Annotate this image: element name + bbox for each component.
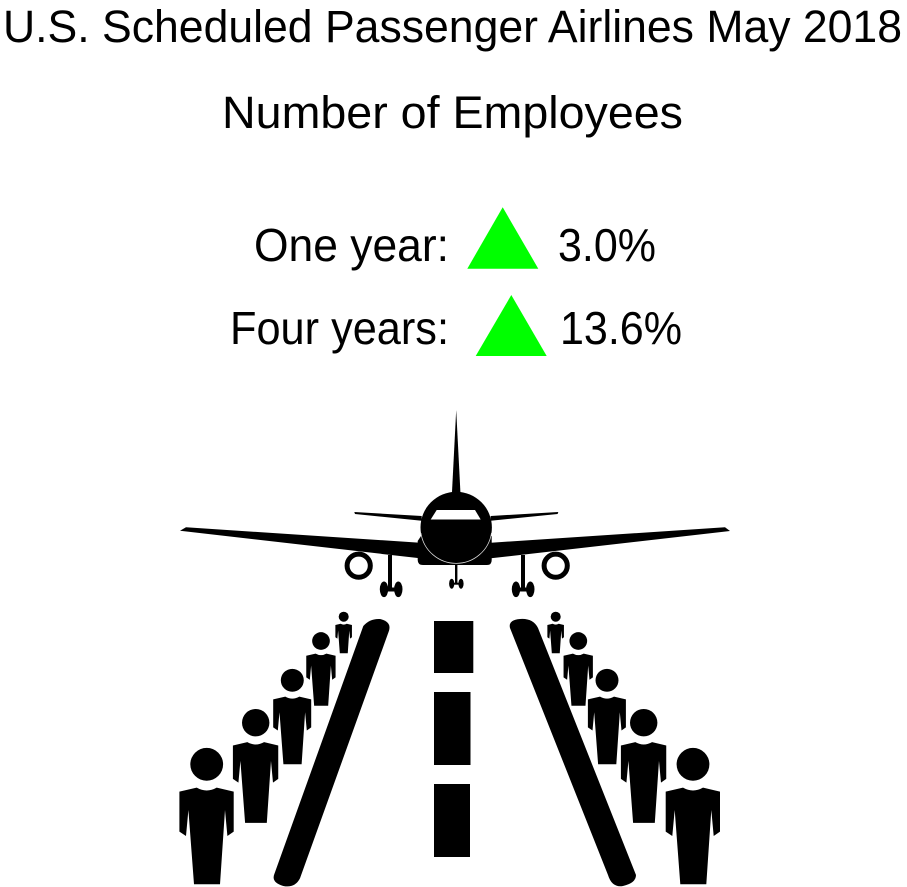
icon: green up triangle, one year xyxy=(467,207,538,269)
runway xyxy=(274,619,636,886)
one year change row xyxy=(254,207,656,271)
right engine ring xyxy=(544,554,567,577)
runway left edge xyxy=(274,619,390,886)
runway right edge xyxy=(510,619,636,886)
left wing xyxy=(180,527,420,558)
tail fin xyxy=(452,410,460,492)
left engine ring xyxy=(347,554,370,577)
person 4 xyxy=(564,632,593,706)
label: four years: Four years: xyxy=(230,302,449,354)
value: one year: 3.0% xyxy=(558,219,656,271)
icon: airplane front view xyxy=(180,410,730,597)
left landing gear xyxy=(380,555,402,597)
left stabilizer xyxy=(354,512,422,521)
person 3 xyxy=(273,669,311,764)
employees: left line xyxy=(179,612,352,884)
right landing gear xyxy=(512,555,534,597)
value: four years: 13.6% xyxy=(560,302,682,354)
person 5 xyxy=(547,612,564,653)
person 2 xyxy=(621,709,666,823)
runway centre dash 2 xyxy=(434,692,470,765)
label: one year: One year: xyxy=(254,219,449,271)
nose landing gear xyxy=(449,564,464,589)
cockpit window xyxy=(431,510,481,520)
person 1 xyxy=(666,748,720,884)
four year change row xyxy=(230,295,682,356)
title: U.S. Scheduled Passenger Airlines May 2018 xyxy=(3,1,902,52)
runway centre dash 3 xyxy=(434,784,470,857)
person 3 xyxy=(588,669,626,764)
engine and lower body xyxy=(418,536,492,565)
employees: right line xyxy=(547,612,720,884)
fuselage xyxy=(420,492,492,563)
person 2 xyxy=(233,709,278,823)
person 5 xyxy=(335,612,352,653)
runway centre dash 1 xyxy=(434,621,473,673)
right stabilizer xyxy=(491,512,558,521)
subtitle: Number of Employees xyxy=(222,87,683,138)
person 1 xyxy=(179,748,234,884)
icon: green up triangle, four years xyxy=(476,295,547,356)
person 4 xyxy=(306,632,336,706)
right wing xyxy=(491,527,730,558)
fuselage highlight xyxy=(421,533,492,563)
